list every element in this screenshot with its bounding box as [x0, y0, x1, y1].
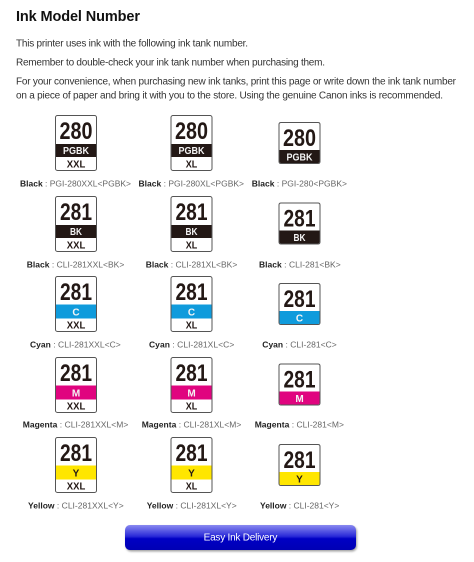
label: PGI-280: Black : PGI-280<PGBK> — [252, 178, 347, 188]
icon: 281 Y — [279, 444, 320, 486]
icon: 281 M XXL: M — [72, 388, 80, 400]
icon: 281 BK XL: XL — [186, 240, 198, 252]
icon: 280 PGBK XXL — [56, 116, 96, 170]
label: CLI-281XXL BK: Black : CLI-281XXL<BK> — [27, 259, 124, 269]
icon: 280 PGBK — [279, 122, 320, 164]
icon: 281 C — [279, 284, 320, 324]
icon: 281 Y XL: XL — [186, 480, 198, 492]
intro text: For your convenience, when purchasing new ink tanks, print this page or write down the ink tank number — [16, 76, 457, 88]
icon: 281 M XL: M — [187, 388, 196, 400]
label: CLI-281 BK: Black : CLI-281<BK> — [259, 259, 341, 269]
icon: 281 BK XXL — [56, 196, 96, 252]
icon: 281 BK XL: 281 — [176, 199, 208, 226]
icon: 281 M XXL — [56, 358, 96, 412]
intro text: This printer uses ink with the following ink tank number. — [16, 38, 248, 50]
icon: 281 M XL: 281 — [176, 360, 208, 387]
label: CLI-281 C: Cyan : CLI-281<C> — [262, 339, 337, 349]
icon: 281 M — [279, 364, 320, 405]
button: Easy Ink Delivery: Easy Ink Delivery — [204, 532, 277, 544]
icon: 281 C XL: C — [188, 308, 195, 318]
icon: 281 BK XXL: 281 — [60, 199, 92, 226]
icon: 281 M XXL: XXL — [67, 400, 86, 412]
icon: 280 PGBK: PGBK — [286, 152, 313, 164]
intro text — [16, 38, 457, 102]
icon: 280 PGBK XXL: PGBK — [63, 146, 90, 157]
icon: 281 Y XL: Y — [188, 468, 195, 480]
icon: 281 Y XL: 281 — [176, 440, 208, 467]
icon: 280 PGBK XL: PGBK — [178, 146, 205, 157]
icon: 281 Y XXL: Y — [73, 468, 80, 480]
icon: 280 PGBK XXL: XXL — [67, 158, 86, 170]
icon: 281 C XL — [171, 276, 212, 332]
icon: 281 BK: BK — [294, 233, 306, 244]
icon: 281 C XXL: 281 — [60, 279, 92, 306]
icon: 281 C: C — [296, 314, 303, 324]
button: Easy Ink Delivery — [125, 525, 357, 552]
icon: 281 Y: 281 — [284, 447, 316, 474]
icon: 281 C XXL: C — [72, 308, 80, 318]
icon: 281 BK XL: BK — [186, 227, 198, 238]
icon: 280 PGBK XL — [171, 116, 212, 170]
title: Ink Model Number — [16, 9, 140, 25]
icon: 281 M XXL: 281 — [60, 360, 92, 387]
label: PGI-280XXL: Black : PGI-280XXL<PGBK> — [20, 178, 131, 188]
label: CLI-281XL BK: Black : CLI-281XL<BK> — [146, 259, 237, 269]
icon: 281 M XL: XL — [186, 400, 198, 412]
icon: 281 C XXL: XXL — [67, 320, 86, 332]
intro text: Remember to double-check your ink tank number when purchasing them. — [16, 58, 325, 68]
icon: 281 BK: 281 — [284, 206, 316, 232]
icon: 281 M XL — [171, 358, 212, 412]
icon: 280 PGBK XXL: 280 — [60, 118, 92, 145]
icon: 280 PGBK XL: XL — [186, 158, 198, 170]
icon: 280 PGBK XL: 280 — [175, 118, 208, 145]
label: CLI-281XL C: Cyan : CLI-281XL<C> — [149, 339, 234, 349]
label: CLI-281XXL Y: Yellow : CLI-281XXL<Y> — [28, 500, 124, 510]
icon: 281 Y XXL: XXL — [67, 480, 86, 492]
label: CLI-281 Y: Yellow : CLI-281<Y> — [260, 500, 339, 510]
intro text: on a piece of paper and bring it with you to the store. Using the genuine Canon inks is recommended. — [16, 90, 443, 102]
icon: 281 BK XL — [171, 196, 212, 252]
icon: 281 BK XXL: BK — [70, 227, 83, 238]
label: CLI-281 M: Magenta : CLI-281<M> — [255, 420, 344, 430]
icon: 281 Y XL — [171, 438, 212, 492]
icon: 280 PGBK: 280 — [283, 125, 316, 152]
icon: 281 M: 281 — [284, 366, 316, 394]
icon: 281 C XL: 281 — [176, 279, 208, 306]
icon: 281 Y XXL: 281 — [60, 440, 92, 467]
label: CLI-281XXL C: Cyan : CLI-281XXL<C> — [30, 339, 121, 349]
icon: 281 C XXL — [56, 276, 96, 332]
label: CLI-281XXL M: Magenta : CLI-281XXL<M> — [23, 420, 128, 430]
label: PGI-280XL: Black : PGI-280XL<PGBK> — [138, 178, 244, 188]
icon: 281 BK XXL: XXL — [67, 240, 86, 252]
icon: 281 Y XXL — [56, 438, 96, 492]
icon: 281 M: M — [295, 394, 304, 405]
label: CLI-281XL Y: Yellow : CLI-281XL<Y> — [147, 500, 237, 510]
icon: 281 Y: Y — [296, 474, 303, 486]
icon: 281 C: 281 — [284, 286, 316, 313]
label: CLI-281XL M: Magenta : CLI-281XL<M> — [142, 420, 241, 430]
icon: 281 BK — [279, 203, 320, 244]
icon: 281 C XL: XL — [186, 320, 198, 332]
